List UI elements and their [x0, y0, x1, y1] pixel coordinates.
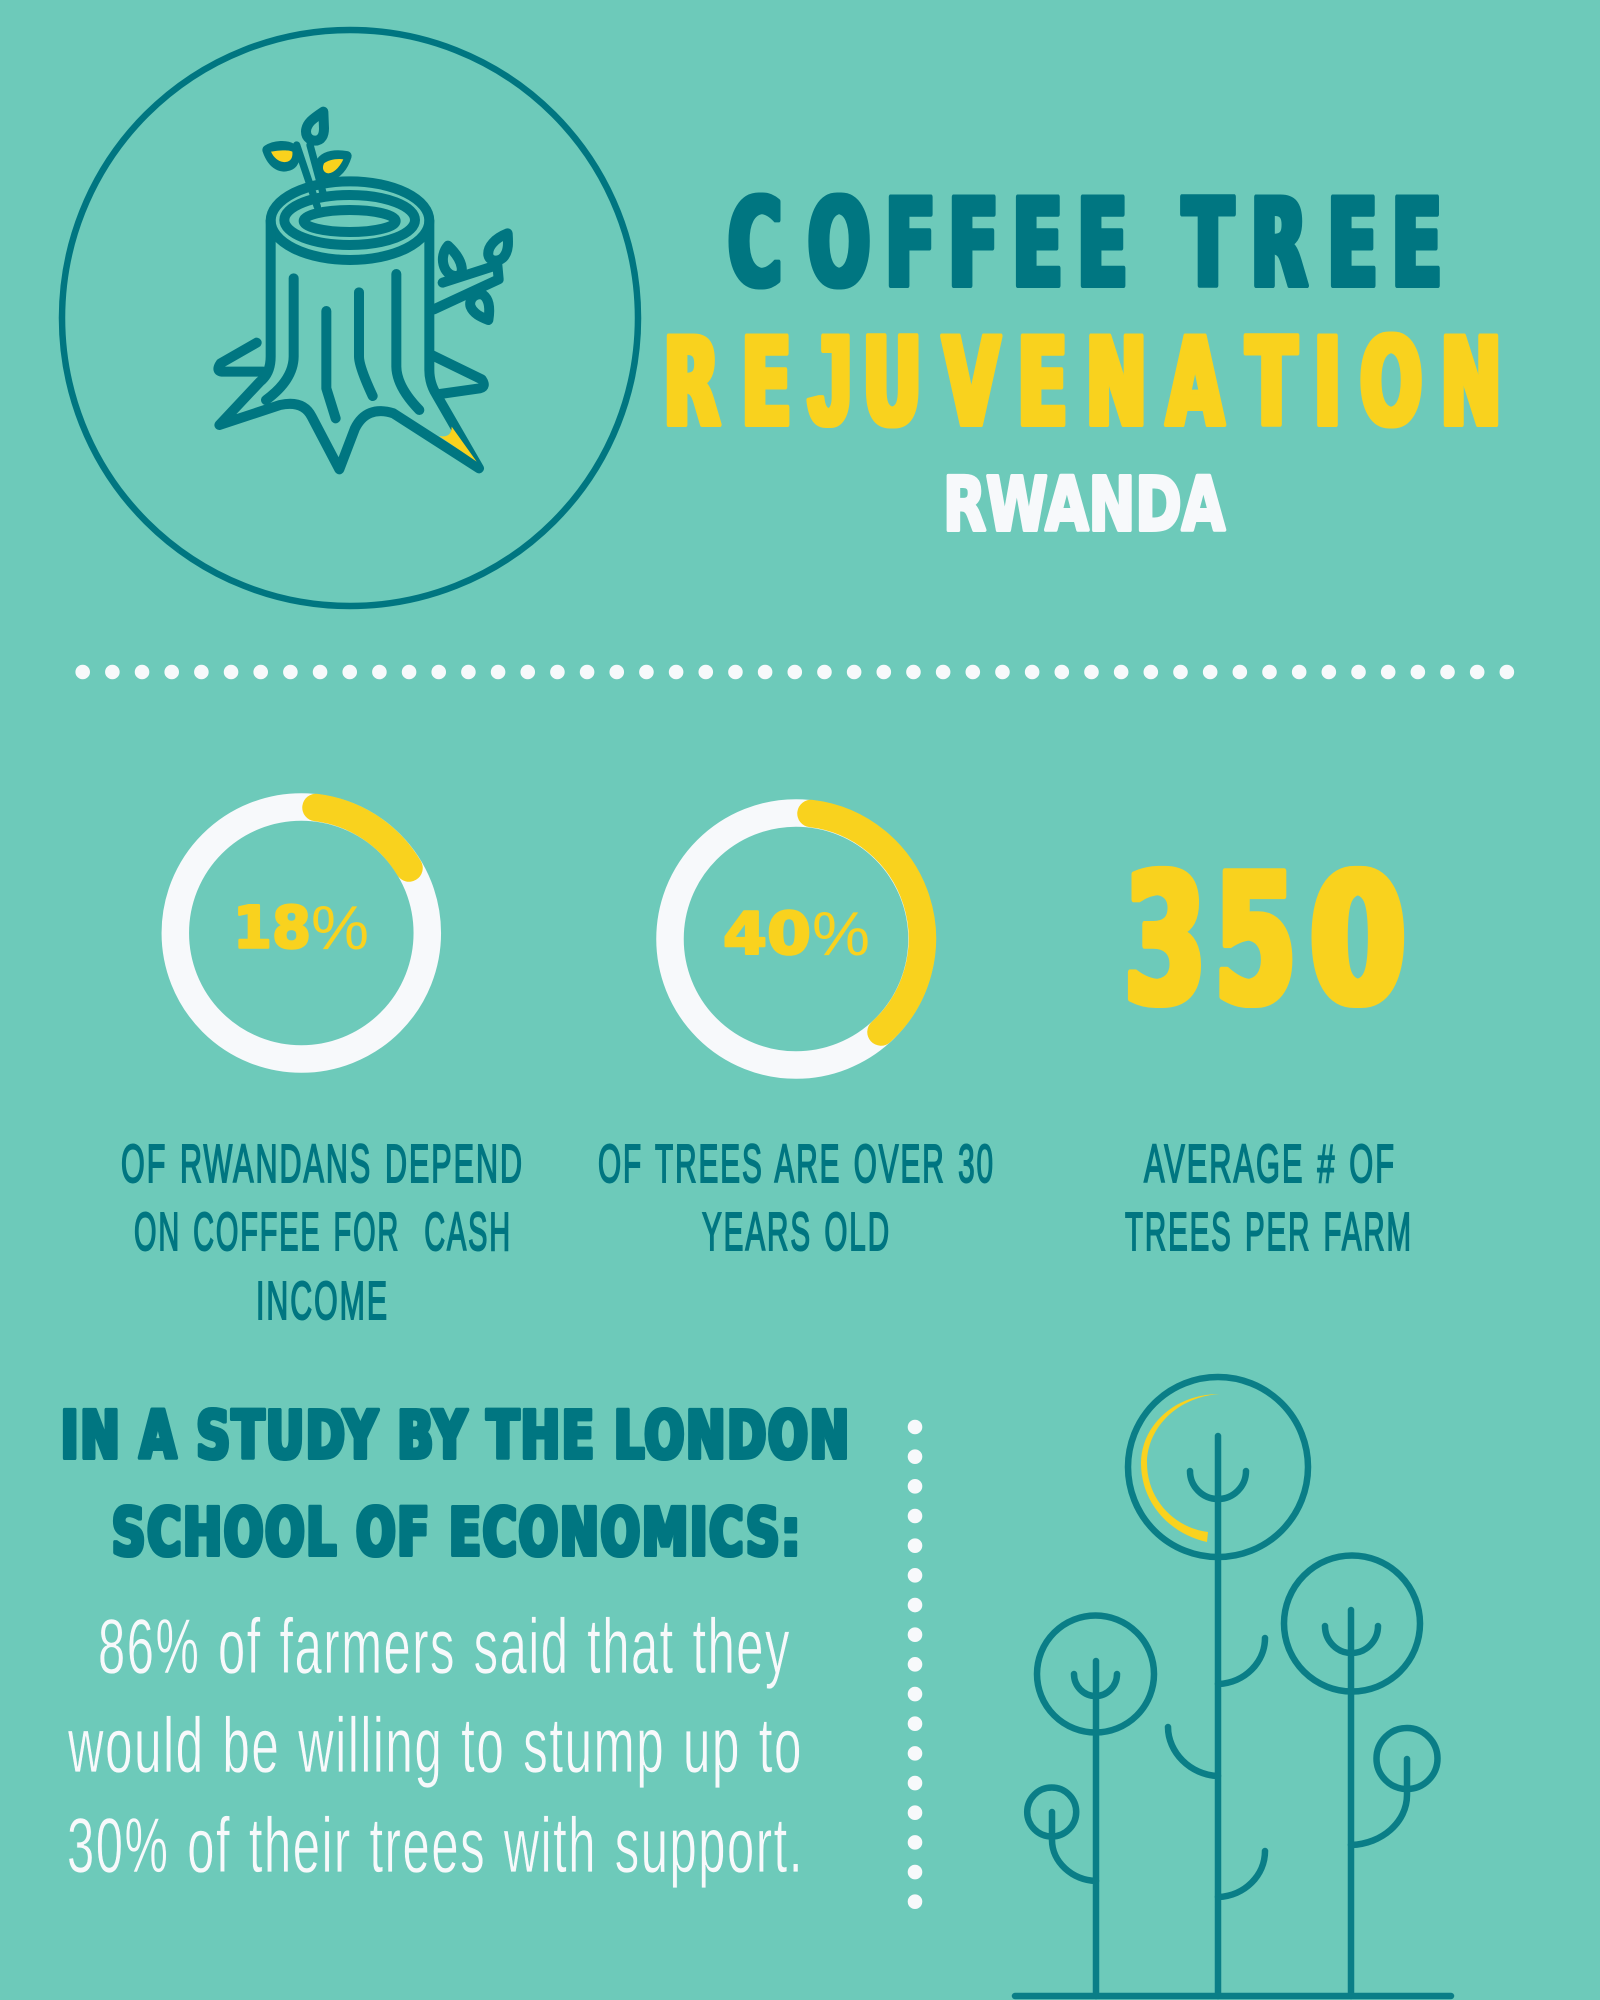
- value: 18%: %: [311, 894, 369, 963]
- caption: trees over 30 years: OF TREES ARE OVER 30: [598, 1134, 995, 1194]
- value: 18%: 18: [233, 894, 311, 962]
- caption: rwandans depend on coffee: [121, 1134, 524, 1331]
- caption: rwandans depend on coffee: OF RWANDANS DEPEND: [121, 1134, 524, 1194]
- caption: rwandans depend on coffee: INCOME: [256, 1271, 389, 1331]
- stat: 40 percent donut: [670, 813, 922, 1065]
- title: coffee tree rejuvenation rwanda: [664, 173, 1501, 548]
- body text: farmers statement: 30% of their trees with support.: [67, 1801, 804, 1889]
- stump illustration: [218, 112, 508, 469]
- stat: 18 percent donut: [175, 807, 427, 1059]
- caption: trees over 30 years: YEARS OLD: [702, 1202, 891, 1262]
- stat: 350 number: 35: [1125, 836, 1296, 1045]
- heading: london school of economics study: IN A STUDY BY THE LONDON: [61, 1397, 851, 1474]
- title line: rejuvenation: REJUVENATION: [664, 309, 1501, 454]
- donut value arc: [316, 808, 409, 868]
- heading: london school of economics study: [61, 1397, 851, 1571]
- caption: rwandans depend on coffee: ON COFFEE FOR CASH: [134, 1202, 512, 1262]
- value: 40%: %: [812, 900, 870, 969]
- donut ring: [670, 813, 922, 1065]
- heading: london school of economics study: SCHOOL OF ECONOMICS:: [112, 1494, 802, 1571]
- value: 40%: [723, 900, 870, 969]
- tall middle tree: [1128, 1377, 1308, 1996]
- stat: 350 number: [1125, 836, 1405, 1045]
- left tree: [1027, 1616, 1154, 1996]
- caption: trees over 30 years: [598, 1134, 995, 1262]
- body text: farmers statement: would be willing to stump up to: [67, 1701, 803, 1789]
- title line: coffee tree: COFFEE TREE: [728, 173, 1442, 315]
- right tree: [1284, 1556, 1438, 1996]
- icon: tree stump in circle: [62, 30, 638, 606]
- body text: farmers statement: [67, 1602, 804, 1889]
- icon: tree illustration: [1015, 1377, 1451, 1996]
- ground line: [1015, 1993, 1451, 1999]
- value: 40%: 40: [723, 900, 811, 968]
- caption: average trees per farm: [1125, 1134, 1413, 1262]
- body text: farmers statement: 86% of farmers said that they: [98, 1602, 791, 1690]
- stat: 350 number: 0: [1310, 836, 1405, 1045]
- caption: average trees per farm: AVERAGE # OF: [1144, 1134, 1396, 1194]
- donut ring: [175, 807, 427, 1059]
- subtitle: rwanda: RWANDA: [943, 462, 1225, 548]
- circle outline: [62, 30, 638, 606]
- donut value arc: [811, 814, 922, 1032]
- value: 18%: [233, 894, 369, 963]
